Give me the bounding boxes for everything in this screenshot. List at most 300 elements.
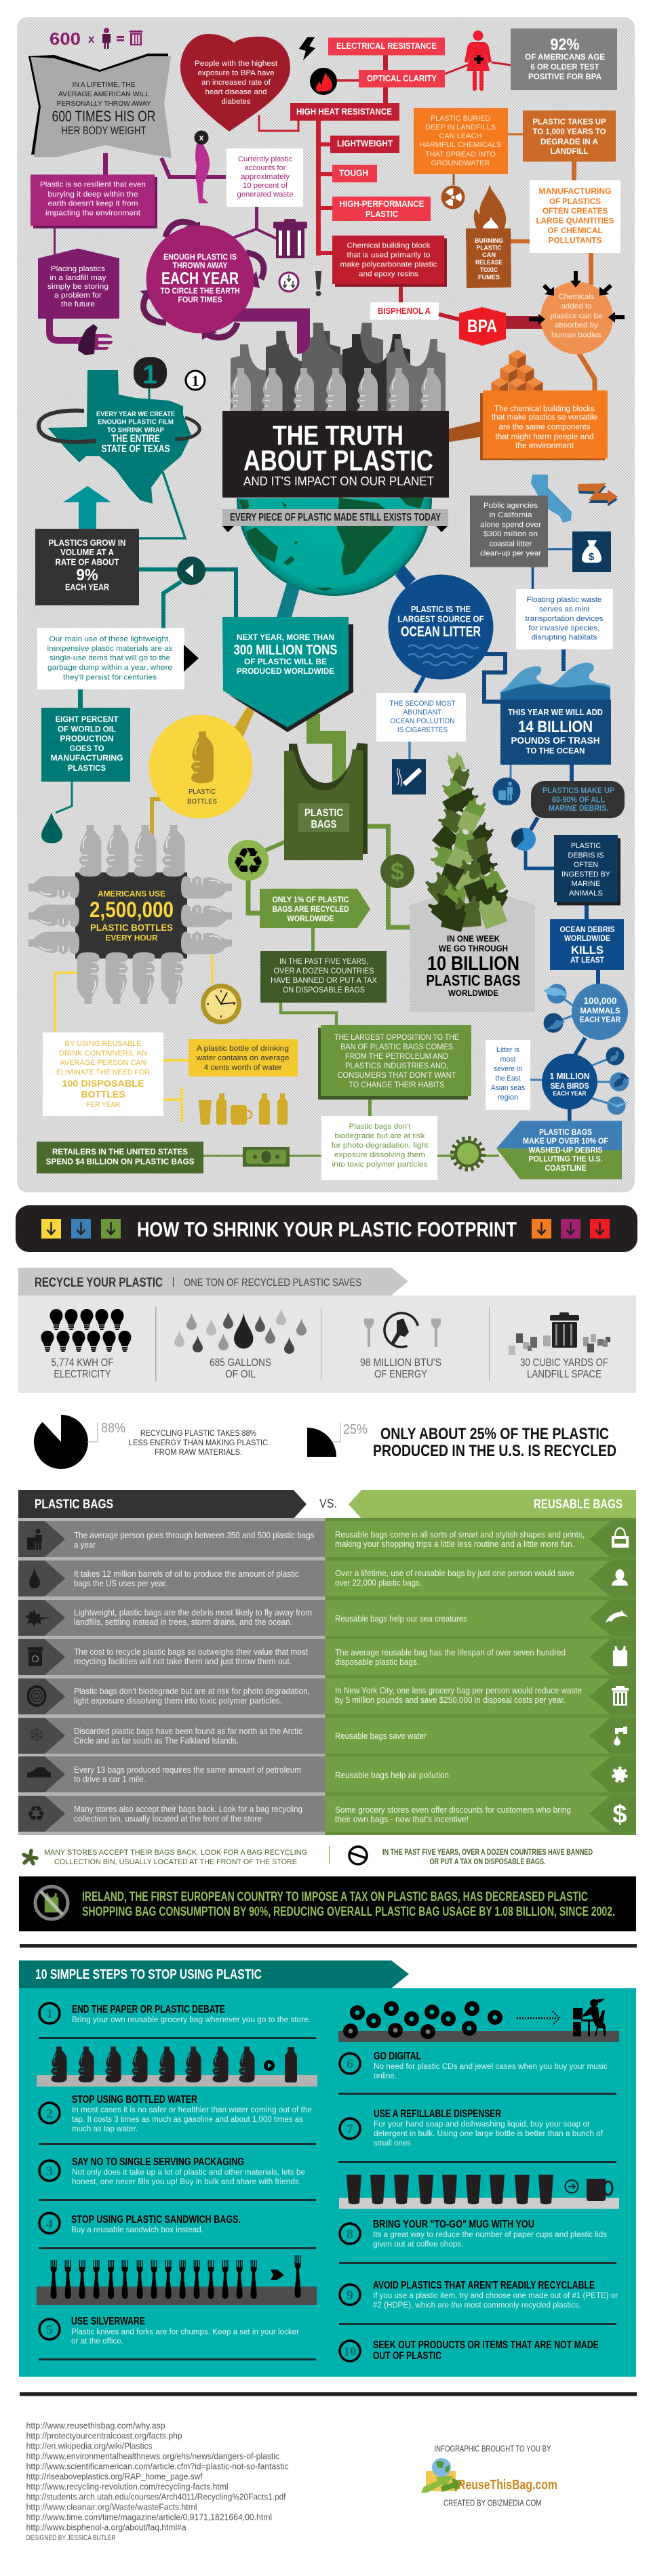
- callout: California spending: Public agencies: [484, 502, 538, 510]
- heading: how to shrink your plastic footprint: [16, 1205, 637, 1252]
- connector: house to hand: [50, 319, 83, 340]
- callout: 1 million sea birds: EACH YEAR: [553, 1090, 587, 1098]
- callout: ingested debris: INGESTED BY: [561, 870, 611, 879]
- callout: 1000 years: [523, 110, 616, 161]
- step 1: 1: [46, 2007, 53, 2021]
- icon: overweight person: x: [199, 133, 204, 142]
- connector: purple circle to title: [231, 308, 310, 354]
- icon set: plastic bag row icons: ♻: [26, 1802, 45, 1826]
- callout: coastline split arrow: POLLUTING THE U.S.: [529, 1155, 602, 1163]
- step 2: STOP USING BOTTLED WATER: [72, 2094, 197, 2106]
- step 2: tap. It costs 3 times as much as gasoline and about 1,000 times as: [72, 2116, 303, 2124]
- connector lines: blue: [395, 549, 619, 1121]
- step 3: 3: [46, 2164, 53, 2179]
- callout: only 1 percent recycled: ONLY 1% OF PLASTIC: [273, 895, 349, 904]
- illustration: forks row: [37, 2255, 317, 2305]
- sources list: http://riseaboveplastics.org/RAP_home_page.swf: [26, 2471, 203, 2481]
- callout: chemical building block: that is used primarily to: [347, 251, 430, 260]
- title block: AND IT'S IMPACT ON OUR PLANET: [243, 475, 434, 488]
- callout: retailers spend: [37, 1142, 203, 1173]
- step 6: No need for plastic CDs and jewel cases when you buy your music: [374, 2063, 608, 2071]
- heading: how to shrink your plastic footprint: HOW TO SHRINK YOUR PLASTIC FOOTPRINT: [137, 1217, 517, 1241]
- step 10: 10: [343, 2345, 357, 2359]
- icon: hand holding bottle: [77, 324, 113, 355]
- text: reusable bag facts: Reusable bags save water: [335, 1731, 427, 1741]
- callout: 92 percent: OF AMERICANS AGE: [525, 52, 605, 62]
- sources list: http://www.reusethisbag.com/why.asp: [26, 2421, 165, 2431]
- sources list: http://protectyourcentralcoast.org/facts.php: [26, 2430, 182, 2440]
- heading: plastic bags: [18, 1490, 307, 1518]
- label: high-performance plastic: HIGH-PERFORMANCE: [339, 199, 425, 209]
- callout: eight percent: [41, 708, 130, 782]
- callout: buried plastic: Plastic is so resilient that even: [40, 180, 146, 188]
- step 5: USE SILVERWARE: [71, 2316, 145, 2327]
- callout: ocean litter: LARGEST SOURCE OF: [397, 615, 484, 624]
- note: stores accept bags back: MANY STORES ACCEPT THEIR BAGS BACK. LOOK FOR A BAG RECYCLING: [44, 1849, 307, 1857]
- callout: ocean litter: [388, 575, 494, 679]
- callout: chemicals circle: human bodies: [551, 331, 602, 339]
- callout: 2,500,000 bottles ring: PLASTIC BOTTLES: [90, 922, 173, 933]
- callout: ten percent of waste: accounts for: [244, 164, 286, 172]
- icon: BPA hexagon: [459, 307, 506, 346]
- callout: plastic buried: PLASTIC BURIED: [431, 115, 490, 123]
- title block: [222, 411, 449, 498]
- logo: ReuseThisBag.com: ReuseThisBag.com: [458, 2478, 557, 2493]
- label: electrical resistance: [328, 38, 445, 56]
- callout: chemical building blocks: [480, 390, 608, 460]
- text: reusable bag facts: over 22,000 plastic bags.: [335, 1578, 422, 1588]
- callout: floating plastic: transportation devices: [525, 615, 604, 623]
- label: lightweight: LIGHTWEIGHT: [337, 139, 393, 148]
- callout: buried plastic: [31, 175, 157, 228]
- callout: reusable containers: PER YEAR: [86, 1101, 120, 1109]
- icon set: plastic bag row icons: [25, 1529, 52, 1826]
- callout: ten percent of waste: Currently plastic: [238, 155, 293, 163]
- note: stores accept bags back: [24, 1849, 307, 1866]
- icon: tree of plastic bags: [423, 752, 511, 932]
- callout: plastic buried: DEEP IN LANDFILLS: [425, 123, 496, 132]
- callout: largest opposition: THE LARGEST OPPOSITION TO THE: [334, 1034, 459, 1042]
- text: plastic bag facts: The average person goes through between 350 and 500 plastic bags: [74, 1531, 315, 1540]
- callout: plastic bottles circle: PLASTIC: [189, 788, 216, 796]
- callout: ocean litter: OCEAN LITTER: [401, 624, 481, 640]
- step 10: [340, 2339, 599, 2362]
- callout: ocean litter: PLASTIC IS THE: [411, 605, 471, 614]
- label: tough: TOUGH: [339, 168, 368, 178]
- callout: largest opposition: FROM THE PETROLEUM AND: [345, 1053, 448, 1061]
- step 6: 6: [347, 2057, 353, 2072]
- callout: 14 billion pounds: THIS YEAR WE WILL ADD: [508, 708, 603, 717]
- callout: floating plastic: serves as mini: [539, 605, 589, 613]
- icon: plastic bag: BAGS: [311, 819, 337, 830]
- callout: kills at least: KILLS: [571, 944, 604, 957]
- callout: burning plastic: [466, 228, 511, 288]
- callout: burning plastic: CAN: [482, 251, 496, 258]
- callout: litter in east asia: Asian seas: [491, 1084, 525, 1092]
- step 8: Its a great way to reduce the number of paper cups and plastic lids: [373, 2231, 607, 2239]
- icon: flame in circle: [310, 68, 337, 95]
- icon: exclamation mark: [315, 271, 321, 296]
- text: plastic bag facts: a year: [74, 1540, 96, 1550]
- text: plastic bag facts: Discarded plastic bags have been found as far north as the Arctic: [74, 1727, 302, 1736]
- step 6: online.: [374, 2072, 397, 2080]
- text: plastic bag facts: Every 13 bags produced requires the same amount of petroleum: [74, 1765, 301, 1775]
- equation: 600 times person equals trash can: x: [88, 33, 95, 45]
- banner: every piece still exists: EVERY PIECE OF PLASTIC MADE STILL EXISTS TODAY: [230, 512, 441, 523]
- icon: dollar circle: $: [391, 858, 404, 885]
- icon: woman with plus: [465, 31, 492, 91]
- callout: landfill house: in a landfill may: [50, 274, 106, 282]
- callout: plastic buried: [414, 108, 508, 174]
- step 2: 2: [46, 2106, 53, 2121]
- icon: up arrow: [63, 486, 111, 529]
- heading: reusable bags: [349, 1490, 636, 1518]
- icon: money bag: [572, 531, 611, 572]
- panel: teal growth section: [35, 357, 353, 843]
- banner: lifetime waste: PERSONALLY THROW AWAY: [57, 100, 151, 108]
- callout: heart: People with the highest: [195, 60, 277, 68]
- callout: largest opposition: [318, 1025, 471, 1100]
- icon: row of plastic bags: [231, 323, 446, 419]
- callout: California spending: alone spend over: [480, 521, 541, 529]
- banner: lifetime waste: IN A LIFETIME, THE: [72, 81, 136, 89]
- label: high-performance plastic: PLASTIC: [366, 209, 398, 219]
- step 3: SAY NO TO SINGLE SERVING PACKAGING: [72, 2156, 244, 2168]
- callout: kills at least: WORLDWIDE: [564, 935, 610, 943]
- callout: 10 billion bags: WORLDWIDE: [448, 988, 498, 998]
- step 7: small ones: [374, 2139, 411, 2148]
- sources list: http://www.recycling-revolution.com/recycling-facts.html: [26, 2481, 229, 2491]
- callout: photo degradation: biodegrade but are at risk: [335, 1132, 425, 1140]
- callout: 1 million sea birds: SEA BIRDS: [551, 1083, 589, 1091]
- stat: energy: OF ENERGY: [374, 1369, 427, 1380]
- callout: marine debris: 60-90% OF ALL: [552, 797, 605, 805]
- sources list: http://en.wikipedia.org/wiki/Plastics: [26, 2440, 153, 2451]
- callout: burning plastic: TOXIC: [480, 266, 498, 273]
- callout: largest opposition: CONSUMERS THAT DON'T WANT: [338, 1072, 456, 1080]
- icon: zigzag arrow: [578, 483, 618, 506]
- callout: burning plastic: FUMES: [478, 274, 500, 281]
- callout: 100,000 mammals: EACH YEAR: [580, 1016, 621, 1024]
- stat: energy: 98 MILLION BTU'S: [360, 1357, 441, 1369]
- icon: oil drop: [41, 812, 62, 843]
- callout: only 1 percent recycled: WORLDWIDE: [288, 914, 334, 923]
- equation: 600 times person equals trash can: 600: [50, 30, 81, 49]
- stat: energy: [360, 1308, 441, 1380]
- callout: chemical building block: make polycarbonate plastic: [340, 260, 437, 268]
- callout: heart: an increased rate of: [201, 79, 271, 87]
- callout: four cents of water: 4 cents worth of water: [203, 1064, 282, 1072]
- stat: recycling takes 88 percent less energy: FROM RAW MATERIALS.: [155, 1447, 242, 1457]
- callout: California spending: $300 million on: [484, 530, 538, 538]
- text: reusable bag facts: The average reusable bag has the lifespan of over seven hundred: [335, 1648, 566, 1657]
- callout: Texas: THE ENTIRE: [111, 433, 160, 445]
- callout: litter in east asia: Litter is: [496, 1046, 519, 1054]
- callout: four cents of water: water contains on average: [195, 1054, 289, 1062]
- callout: plastic bottles circle: BOTTLES: [187, 797, 217, 805]
- callout: photo degradation: into toxic polymer particles: [332, 1161, 428, 1169]
- step 2: [39, 2094, 312, 2133]
- callout: floating plastic: disrupting habitats: [532, 634, 597, 642]
- step 1: END THE PAPER OR PLASTIC DEBATE: [72, 2004, 225, 2015]
- callout: reusable containers: DRINK CONTAINERS, AN: [59, 1049, 147, 1058]
- panel: globe: [237, 498, 432, 596]
- heading: plastic bags: PLASTIC BAGS: [35, 1497, 113, 1512]
- stat: landfill space: [509, 1312, 610, 1380]
- callout: ten percent of waste: [226, 148, 303, 207]
- callout: plastic bottles circle: [149, 715, 252, 819]
- step 7: For your hand soap and dishwashing liquid, buy your soap or: [374, 2120, 590, 2129]
- stat: landfill space: 30 CUBIC YARDS OF: [520, 1357, 608, 1369]
- callout: litter in east asia: the East: [495, 1074, 521, 1083]
- callout: reusable containers: 100 DISPOSABLE: [62, 1078, 144, 1089]
- stat: electricity: [41, 1309, 132, 1380]
- connector: teal box to bag: [307, 714, 346, 784]
- icon: number one badge: [134, 357, 167, 390]
- callout: coastline split arrow: PLASTIC BAGS: [539, 1129, 592, 1137]
- callout: plastics grow: RATE OF ABOUT: [56, 557, 119, 567]
- callout: eight percent: OF WORLD OIL: [58, 724, 116, 733]
- step 9: If you use a plastic item, try and choose one made out of #1 (PETE) or: [373, 2292, 618, 2300]
- callout: California spending: coastal litter: [490, 540, 532, 548]
- step 9: 9: [347, 2288, 353, 2303]
- callout: chemical building block: Chemical building block: [347, 241, 431, 249]
- callout: chemicals circle: plastics can be: [551, 312, 602, 320]
- step 1: Bring your own reusable grocery bag whenever you go to the store.: [72, 2016, 311, 2024]
- callout: floating plastic: Floating plastic waste: [526, 596, 602, 604]
- callout: largest opposition: BAN OF PLASTIC BAGS COMES: [340, 1043, 453, 1051]
- callout: cigarettes: OCEAN POLLUTION: [391, 717, 455, 725]
- callout: buried plastic: impacting the environment: [45, 209, 140, 218]
- stat: recycling takes 88 percent less energy: RECYCLING PLASTIC TAKES 88%: [140, 1428, 256, 1438]
- icon: clock: [201, 984, 241, 1024]
- callout: 2,500,000 bottles ring: [28, 825, 232, 1004]
- text: reusable bag facts: their own bags - now that's incentive!: [335, 1815, 469, 1824]
- callout: 92 percent: 6 OR OLDER TEST: [530, 62, 599, 72]
- label: high-performance plastic: [332, 197, 431, 221]
- callout: manufacturing pollutants: OF CHEMICAL: [548, 226, 602, 235]
- callout: 92 percent: 92%: [551, 35, 579, 54]
- callout: 10 billion bags: [410, 885, 535, 1012]
- callout: eight percent: GOES TO: [69, 744, 104, 753]
- step 3: honest, one never fills you up! Buy in bulk and share with friends.: [72, 2178, 301, 2186]
- icon: overweight person: [194, 130, 210, 203]
- text: plastic bag facts: Plastic bags don't biodegrade but are at risk for photo degradation,: [74, 1687, 310, 1696]
- callout: manufacturing pollutants: LARGE QUANTITIES: [536, 216, 614, 225]
- callout: heart: diabetes: [221, 98, 251, 106]
- callout: eight percent: PRODUCTION: [60, 734, 114, 744]
- callout: 2,500,000 bottles ring: 2,500,000: [90, 898, 174, 922]
- icon: black arrows pointing at circle: [529, 271, 625, 325]
- icon: radiation: [441, 186, 465, 209]
- connector: white box to trash and circle: [233, 229, 277, 239]
- step 8: 8: [347, 2227, 353, 2242]
- callout: reusable containers: [43, 1032, 163, 1116]
- callout: 10 billion bags: 10 BILLION: [427, 952, 519, 975]
- callout: 1000 years: LANDFILL: [551, 146, 589, 156]
- callout: single use: they'll persist for centuries: [63, 674, 157, 682]
- callout: chemical building blocks: are the same components: [499, 424, 591, 432]
- label: bisphenol A: BISPHENOL A: [378, 306, 431, 316]
- callout: plastic buried: HARMFUL CHEMICALS: [419, 141, 502, 149]
- icon: recycle circle: ♻: [232, 840, 264, 883]
- stat: recycling takes 88 percent less energy: [34, 1415, 268, 1469]
- sources list: http://www.cleanair.org/Waste/wasteFacts.html: [26, 2501, 197, 2512]
- callout: marine debris: MARINE DEBRIS.: [549, 805, 608, 813]
- callout: landfill house: Placing plastics: [51, 265, 106, 273]
- callout: bans and taxes: IN THE PAST FIVE YEARS,: [279, 958, 368, 966]
- callout: reusable containers: AVERAGE PERSON CAN: [60, 1059, 146, 1067]
- connector: heart to heat resistance: [259, 115, 298, 131]
- stat: recycling takes 88 percent less energy: LESS ENERGY THAN MAKING PLASTIC: [129, 1438, 268, 1447]
- panel: hatched background of upper infographic: [17, 17, 635, 1192]
- callout: bans and taxes: [260, 951, 387, 1003]
- heading: recycle your plastic: RECYCLE YOUR PLASTIC: [35, 1276, 163, 1290]
- stat: electricity: ELECTRICITY: [54, 1369, 111, 1380]
- credits and logo: CREATED BY OBIZMEDIA.COM: [443, 2497, 541, 2508]
- callout: enough plastic circle: THROWN AWAY: [172, 261, 228, 270]
- callout: manufacturing pollutants: [530, 180, 620, 253]
- callout: floating plastic: [516, 589, 613, 649]
- callout: 300 million tons pentagon: OF PLASTIC WILL BE: [244, 657, 327, 666]
- callout: ingested debris: MARINE: [571, 880, 601, 888]
- callout: marine debris: [531, 781, 625, 818]
- step 1: [39, 2003, 311, 2024]
- sources list: http://students.arch.utah.edu/courses/Arch4011/Recycling%20Facts1.pdf: [26, 2491, 286, 2501]
- callout: buried plastic: burying it deep within the: [47, 190, 138, 199]
- callout: ten percent of waste: generated waste: [237, 190, 293, 199]
- step 8: BRING YOUR "TO-GO" MUG WITH YOU: [373, 2219, 534, 2230]
- callout: 300 million tons pentagon: [222, 617, 353, 732]
- callout: cigarettes: [376, 693, 466, 742]
- step 2: In most cases it is no safer or healthier than water coming out of the: [72, 2106, 312, 2114]
- text: plastic bag facts: Circle and as far south as The Falkland Islands.: [74, 1736, 239, 1746]
- callout: enough plastic circle: EACH YEAR: [161, 269, 239, 288]
- callout: manufacturing pollutants: MANUFACTURING: [538, 186, 612, 196]
- callout: chemical building blocks: the environment: [515, 442, 574, 450]
- callout: 100,000 mammals: [572, 984, 628, 1040]
- panel: title bags and bottles: [231, 308, 446, 419]
- callout: ten percent of waste: approximately: [241, 173, 290, 181]
- connector: BPA links: [439, 315, 544, 329]
- icon set: reusable bag row icons: $: [612, 1800, 627, 1829]
- connector: orange box to title: [449, 421, 483, 442]
- callout: marine debris: PLASTICS MAKE UP: [542, 787, 614, 795]
- sources list: http://www.bisphenol-a.org/about/faq.html#a: [26, 2522, 186, 2532]
- equation: 600 times person equals trash can: [50, 28, 142, 49]
- callout: eight percent: EIGHT PERCENT: [56, 715, 119, 724]
- step 8: given out at coffee shops.: [373, 2240, 464, 2249]
- label: high heat resistance: HIGH HEAT RESISTANCE: [296, 107, 392, 117]
- callout: only 1 percent recycled: [260, 889, 370, 928]
- heading: 10 simple steps: [19, 1960, 409, 1988]
- illustration: bottled water row: [37, 2047, 317, 2087]
- heading: recycle your plastic: ONE TON OF RECYCLED PLASTIC SAVES: [184, 1277, 361, 1289]
- callout: 92 percent: POSITIVE FOR BPA: [528, 72, 601, 81]
- label: optical clarity: OPTICAL CLARITY: [367, 74, 437, 83]
- callout: heart: [180, 34, 290, 132]
- sources list: http://www.environmentalhealthnews.org/ehs/news/dangers-of-plastic: [26, 2451, 280, 2461]
- stat: recycling takes 88 percent less energy: 88%: [101, 1421, 125, 1436]
- callout: enough plastic circle: [146, 225, 254, 334]
- callout: 1 million sea birds: [542, 1053, 597, 1109]
- text: reusable bag facts: Reusable bags come in all sorts of smart and stylish shapes and prints,: [335, 1530, 585, 1539]
- connector lines: teal: [56, 388, 236, 813]
- step 10: OUT OF PLASTIC: [373, 2350, 441, 2362]
- step 5: [39, 2316, 299, 2346]
- step 7: [340, 2108, 604, 2148]
- callout: largest opposition: PLASTICS INDUSTRIES AND,: [345, 1062, 448, 1070]
- step 4: STOP USING PLASTIC SANDWICH BAGS.: [71, 2214, 241, 2226]
- callout: plastics grow: 9%: [76, 566, 98, 584]
- callout: manufacturing pollutants: OFTEN CREATES: [542, 206, 608, 216]
- step 5: or at the office.: [71, 2337, 123, 2346]
- step 3: [39, 2156, 305, 2186]
- callout: chemical building blocks: The chemical building blocks: [494, 405, 595, 414]
- callout: enough plastic circle: TO CIRCLE THE EARTH: [160, 286, 240, 296]
- logo: ReuseThisBag.com: [421, 2458, 557, 2493]
- callout: chemicals circle: [540, 282, 613, 354]
- text: plastic bag facts: Lightweight, plastic bags are the debris most likely to fly away from: [74, 1608, 312, 1617]
- callout: bans and taxes: OVER A DOZEN COUNTRIES: [274, 967, 374, 975]
- icon: dolphins: [541, 984, 568, 1033]
- connector lines: properties: [316, 55, 511, 302]
- callout: single use: [37, 628, 184, 689]
- callout: bans and taxes: ON DISPOSABLE BAGS: [283, 986, 365, 994]
- panel: green plastic bags section: [37, 743, 535, 1180]
- title block: ABOUT PLASTIC: [243, 445, 433, 477]
- callout: chemical building blocks: that make plastics so versatile: [492, 414, 597, 422]
- note: countries have banned bags: [349, 1847, 593, 1866]
- text: plastic bag facts: bags the US uses per year.: [74, 1579, 167, 1588]
- illustration: CDs to digital: [338, 1998, 619, 2042]
- step 7: 7: [347, 2122, 353, 2137]
- text: reusable bag facts: making your shopping trips a little less routine and a little more fun.: [335, 1539, 574, 1549]
- icon: sun: [454, 1140, 482, 1168]
- stat: landfill space: LANDFILL SPACE: [527, 1369, 601, 1380]
- callout: 100,000 mammals: 100,000: [583, 995, 617, 1006]
- callout: litter in east asia: most: [500, 1055, 515, 1064]
- callout: buried plastic: earth doesn't keep it from: [47, 199, 138, 207]
- callout: 300 million tons pentagon: NEXT YEAR, MORE THAN: [237, 632, 334, 642]
- callout: 2,500,000 bottles ring: EVERY HOUR: [106, 933, 158, 942]
- text: plastic bag facts: light exposure dissolving them into toxic polymer particles.: [74, 1696, 282, 1706]
- icon: circled number one: 1: [191, 372, 199, 389]
- step 9: #2 (HDPE), which are the most commonly recycled plastics.: [373, 2301, 581, 2310]
- panel: blue ocean section: [376, 475, 630, 1180]
- callout: litter in east asia: severe in: [494, 1065, 522, 1073]
- panel: plastic bags versus reusable bags: [18, 1490, 636, 1835]
- text: plastic bag facts: [74, 1531, 315, 1824]
- callout: 10 billion bags: WE GO THROUGH: [439, 944, 508, 954]
- connector: purple box to house: [54, 228, 56, 254]
- label: tough: [332, 165, 377, 182]
- callout: 14 billion pounds: [500, 700, 611, 765]
- callout: kills at least: AT LEAST: [570, 957, 604, 965]
- panel: purple waste section: [28, 28, 321, 355]
- callout: 1 million sea birds: 1 MILLION: [549, 1071, 590, 1081]
- icon: sea birds: [604, 1047, 630, 1114]
- callout: cigarettes: IS CIGARETTES: [397, 726, 448, 734]
- callout: 1000 years: PLASTIC TAKES UP: [533, 117, 606, 127]
- callout: largest opposition: TO CHANGE THEIR HABITS: [349, 1081, 445, 1089]
- icon: cigarette: [392, 759, 426, 794]
- connector: globe to teal box: [277, 583, 300, 617]
- callout: heart: exposure to BPA have: [198, 69, 274, 77]
- icon: plastic bag: PLASTIC: [304, 807, 343, 819]
- label: bisphenol A: [370, 302, 439, 320]
- icon: money bag: $: [589, 551, 595, 563]
